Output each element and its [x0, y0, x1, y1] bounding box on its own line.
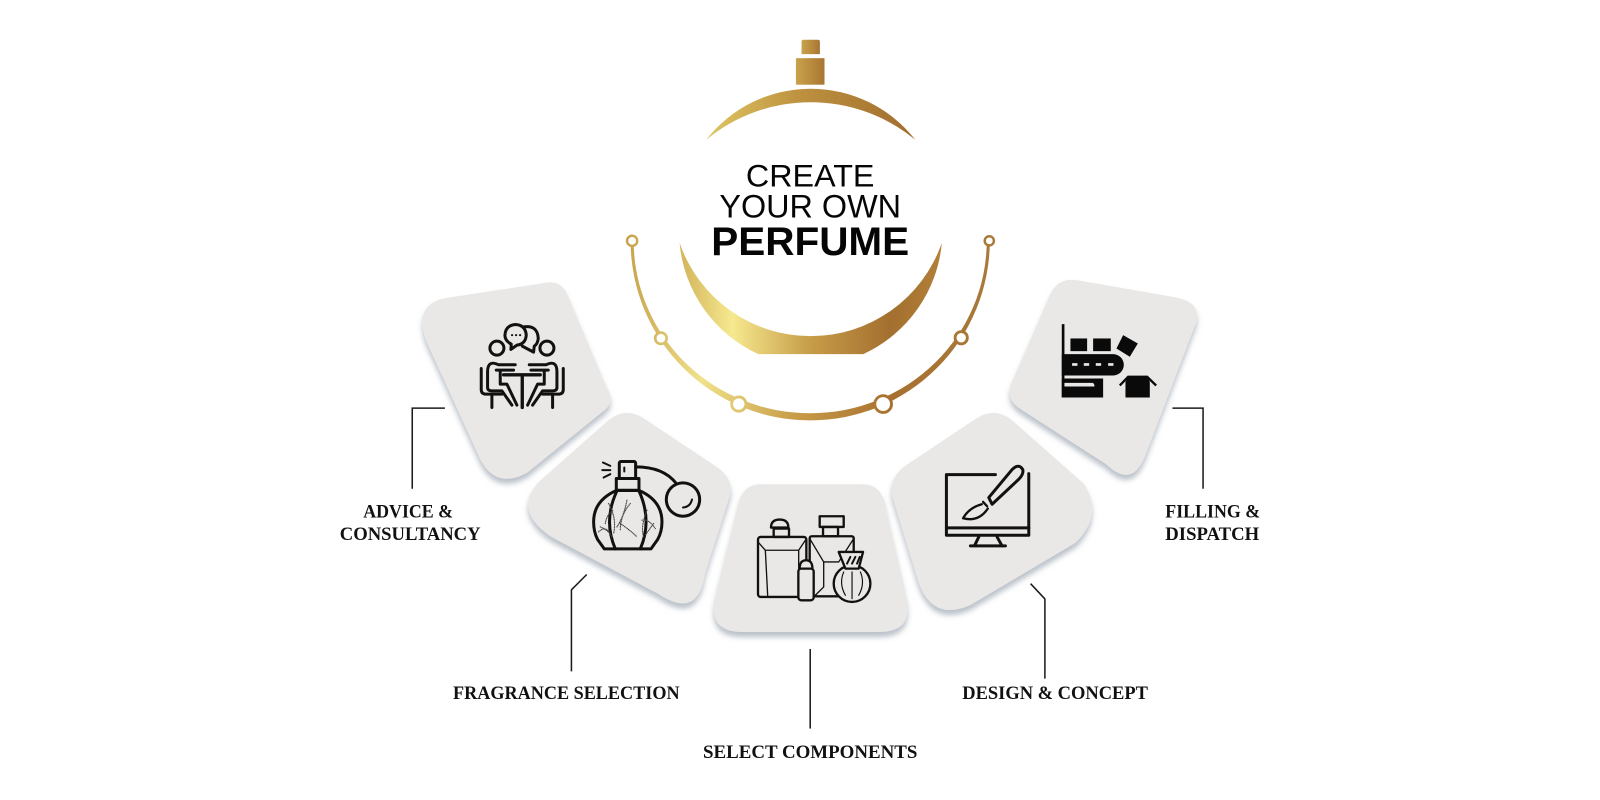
title: YOUR OWN	[719, 188, 901, 224]
icon: perfume bottles	[758, 516, 870, 602]
label: select components: SELECT COMPONENTS	[703, 742, 917, 763]
label: filling and dispatch	[1165, 501, 1260, 545]
card 5	[1010, 280, 1197, 475]
label: filling and dispatch: FILLING &	[1165, 501, 1260, 522]
connector: filling	[1172, 408, 1203, 489]
chain arc with nodes	[627, 236, 994, 420]
label: advice and consultancy: ADVICE &	[363, 501, 453, 522]
card 1	[422, 282, 611, 479]
bottle cap top	[802, 40, 820, 54]
title	[711, 158, 909, 264]
bottle base crescent	[680, 243, 942, 354]
icon: monitor and brush	[946, 466, 1029, 546]
chain nodes	[627, 236, 994, 412]
label: fragrance selection: FRAGRANCE SELECTION	[453, 683, 680, 704]
label: advice and consultancy: CONSULTANCY	[340, 524, 481, 545]
bottle shoulder arc	[706, 89, 915, 140]
bottle cap collar	[796, 58, 824, 85]
connector: components	[809, 649, 811, 729]
connector: fragrance	[571, 574, 587, 671]
label: design and concept: DESIGN & CONCEPT	[962, 683, 1148, 704]
chain arc	[631, 241, 990, 420]
panel: filling and dispatch	[1010, 280, 1197, 475]
icon: conveyor and box	[1062, 324, 1156, 397]
card 4	[892, 413, 1092, 610]
icon: atomizer perfume bottle	[594, 462, 700, 549]
panel: advice and consultancy	[422, 282, 611, 479]
panel: design and concept	[892, 413, 1092, 610]
icon: consultation meeting	[481, 324, 563, 407]
label: advice and consultancy	[340, 501, 481, 545]
title: PERFUME	[711, 219, 909, 264]
card 3	[714, 484, 908, 632]
stipple texture	[599, 500, 655, 537]
connector: advice	[412, 408, 445, 489]
label: filling and dispatch: DISPATCH	[1165, 524, 1260, 545]
title: CREATE	[746, 158, 874, 194]
connector: design	[1031, 584, 1045, 679]
panel: fragrance selection	[528, 413, 731, 603]
panel: select components	[714, 484, 908, 632]
perfume bottle	[680, 40, 942, 354]
card 2	[528, 413, 731, 603]
